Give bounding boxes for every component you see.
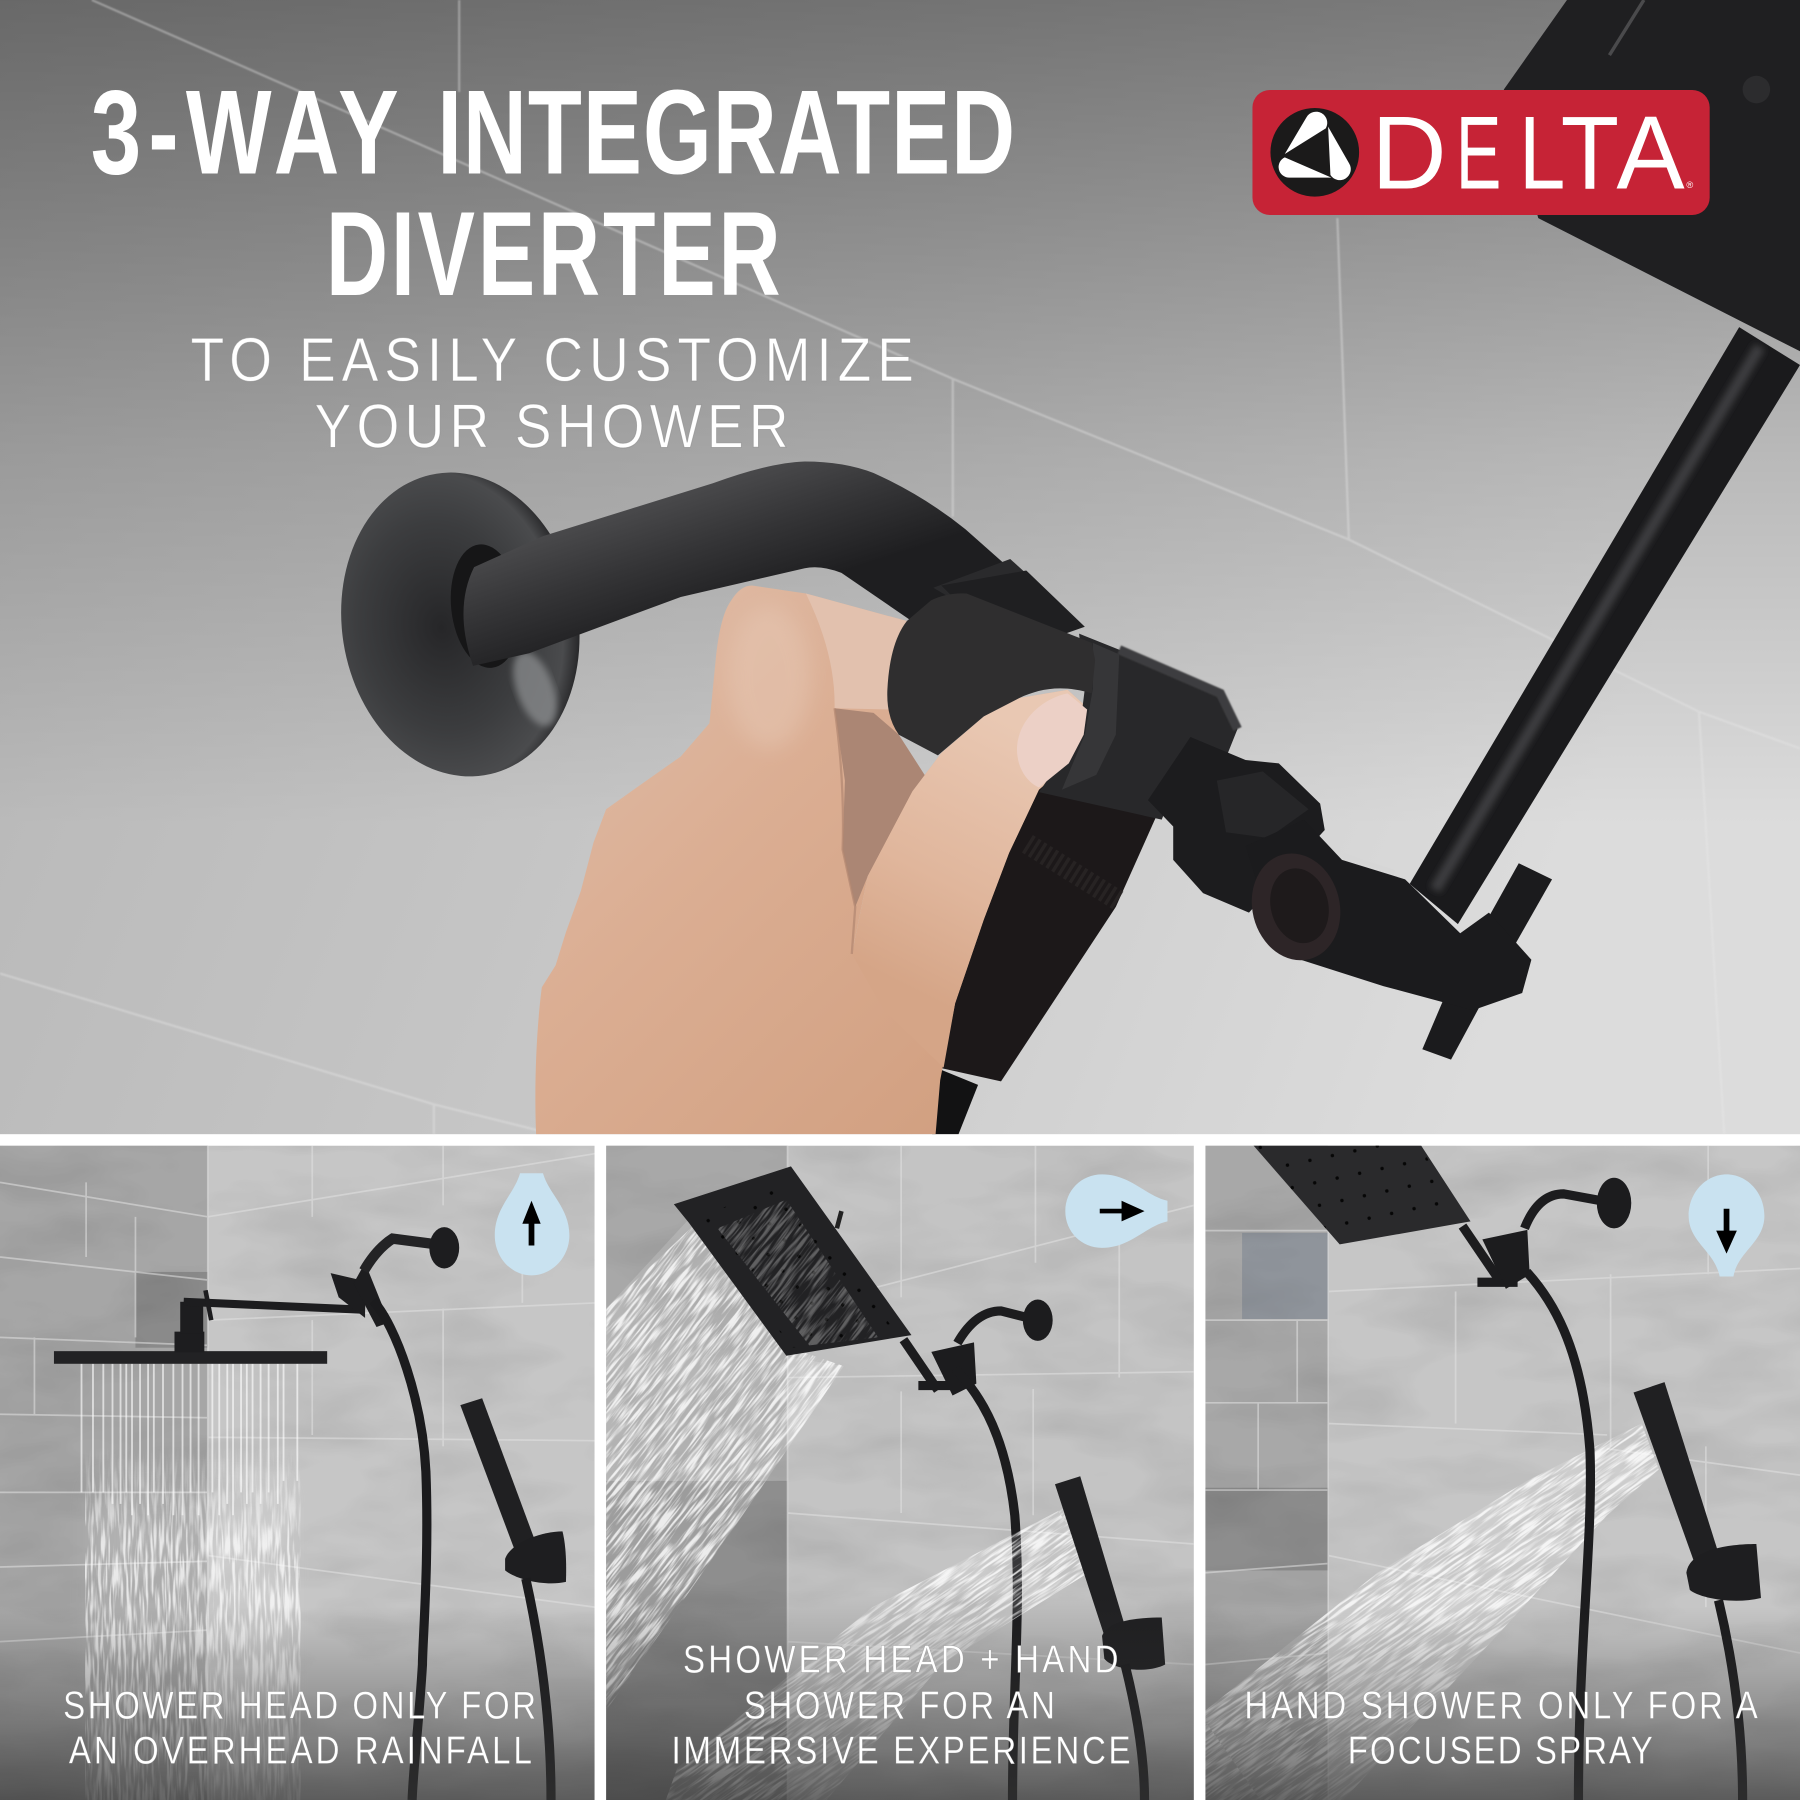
hand shower	[1634, 1382, 1761, 1800]
hose	[373, 1301, 427, 1800]
logo: Delta: T	[1561, 95, 1619, 211]
caption: SHOWER HEAD ONLY FOR	[63, 1684, 536, 1727]
rain shower head and arm	[54, 1227, 459, 1364]
caption	[64, 1691, 534, 1764]
logo: Delta: E	[1456, 95, 1501, 211]
wall flange	[320, 455, 601, 794]
hand	[535, 585, 1089, 1134]
rain shower head	[1254, 1146, 1471, 1244]
rain spray	[606, 1219, 844, 1710]
subtitle: TO EASILY CUSTOMIZE	[191, 326, 914, 395]
diverter and arm	[1462, 1178, 1631, 1800]
water column	[82, 1364, 301, 1800]
panel: hero photo	[0, 0, 1800, 1134]
hand shower	[1055, 1476, 1165, 1800]
caption: IMMERSIVE EXPERIENCE	[672, 1729, 1131, 1772]
shower arm	[463, 461, 1016, 666]
shower head corner	[1504, 0, 1800, 351]
logo: Delta: D	[1371, 95, 1447, 211]
subtitle	[191, 326, 914, 461]
diverter body	[1039, 634, 1238, 820]
thumb nail	[1017, 693, 1087, 788]
caption: FOCUSED SPRAY	[1348, 1729, 1653, 1772]
hand spray	[666, 1506, 1085, 1800]
caption: AN OVERHEAD RAINFALL	[69, 1729, 532, 1772]
hand spray	[1205, 1423, 1659, 1800]
angled rain shower head	[674, 1166, 911, 1356]
diverter knob	[887, 593, 1095, 755]
rod	[1410, 327, 1800, 924]
logo: Delta: L	[1519, 95, 1565, 211]
title: 3-WAY	[91, 66, 399, 199]
subtitle: YOUR SHOWER	[315, 393, 789, 461]
title: INTEGRATED	[437, 66, 1015, 199]
panel: shower head only	[0, 1146, 595, 1800]
hose connector	[932, 781, 1159, 1134]
hand shower	[460, 1398, 566, 1800]
water drop icon: down	[1689, 1174, 1764, 1277]
logo: Delta: A	[1616, 95, 1685, 211]
caption: HAND SHOWER ONLY FOR A	[1244, 1684, 1758, 1727]
caption	[674, 1645, 1130, 1764]
caption: SHOWER FOR AN	[744, 1684, 1055, 1727]
title: DIVERTER	[326, 188, 781, 321]
caption	[1246, 1691, 1758, 1764]
threaded nut	[933, 559, 1085, 643]
cross pin	[1422, 863, 1552, 1060]
logo: Delta	[1252, 90, 1710, 215]
title	[91, 66, 1015, 321]
swivel elbow	[1148, 737, 1531, 1010]
caption: SHOWER HEAD + HAND	[683, 1638, 1118, 1681]
panel: shower head plus hand shower	[606, 1146, 1194, 1800]
diverter and arm	[903, 1299, 1053, 1800]
water drop icon: up	[495, 1173, 569, 1275]
panel: hand shower only	[1205, 1146, 1800, 1800]
logo: Delta: ®	[1686, 180, 1693, 190]
water drop icon: right	[1065, 1174, 1167, 1248]
